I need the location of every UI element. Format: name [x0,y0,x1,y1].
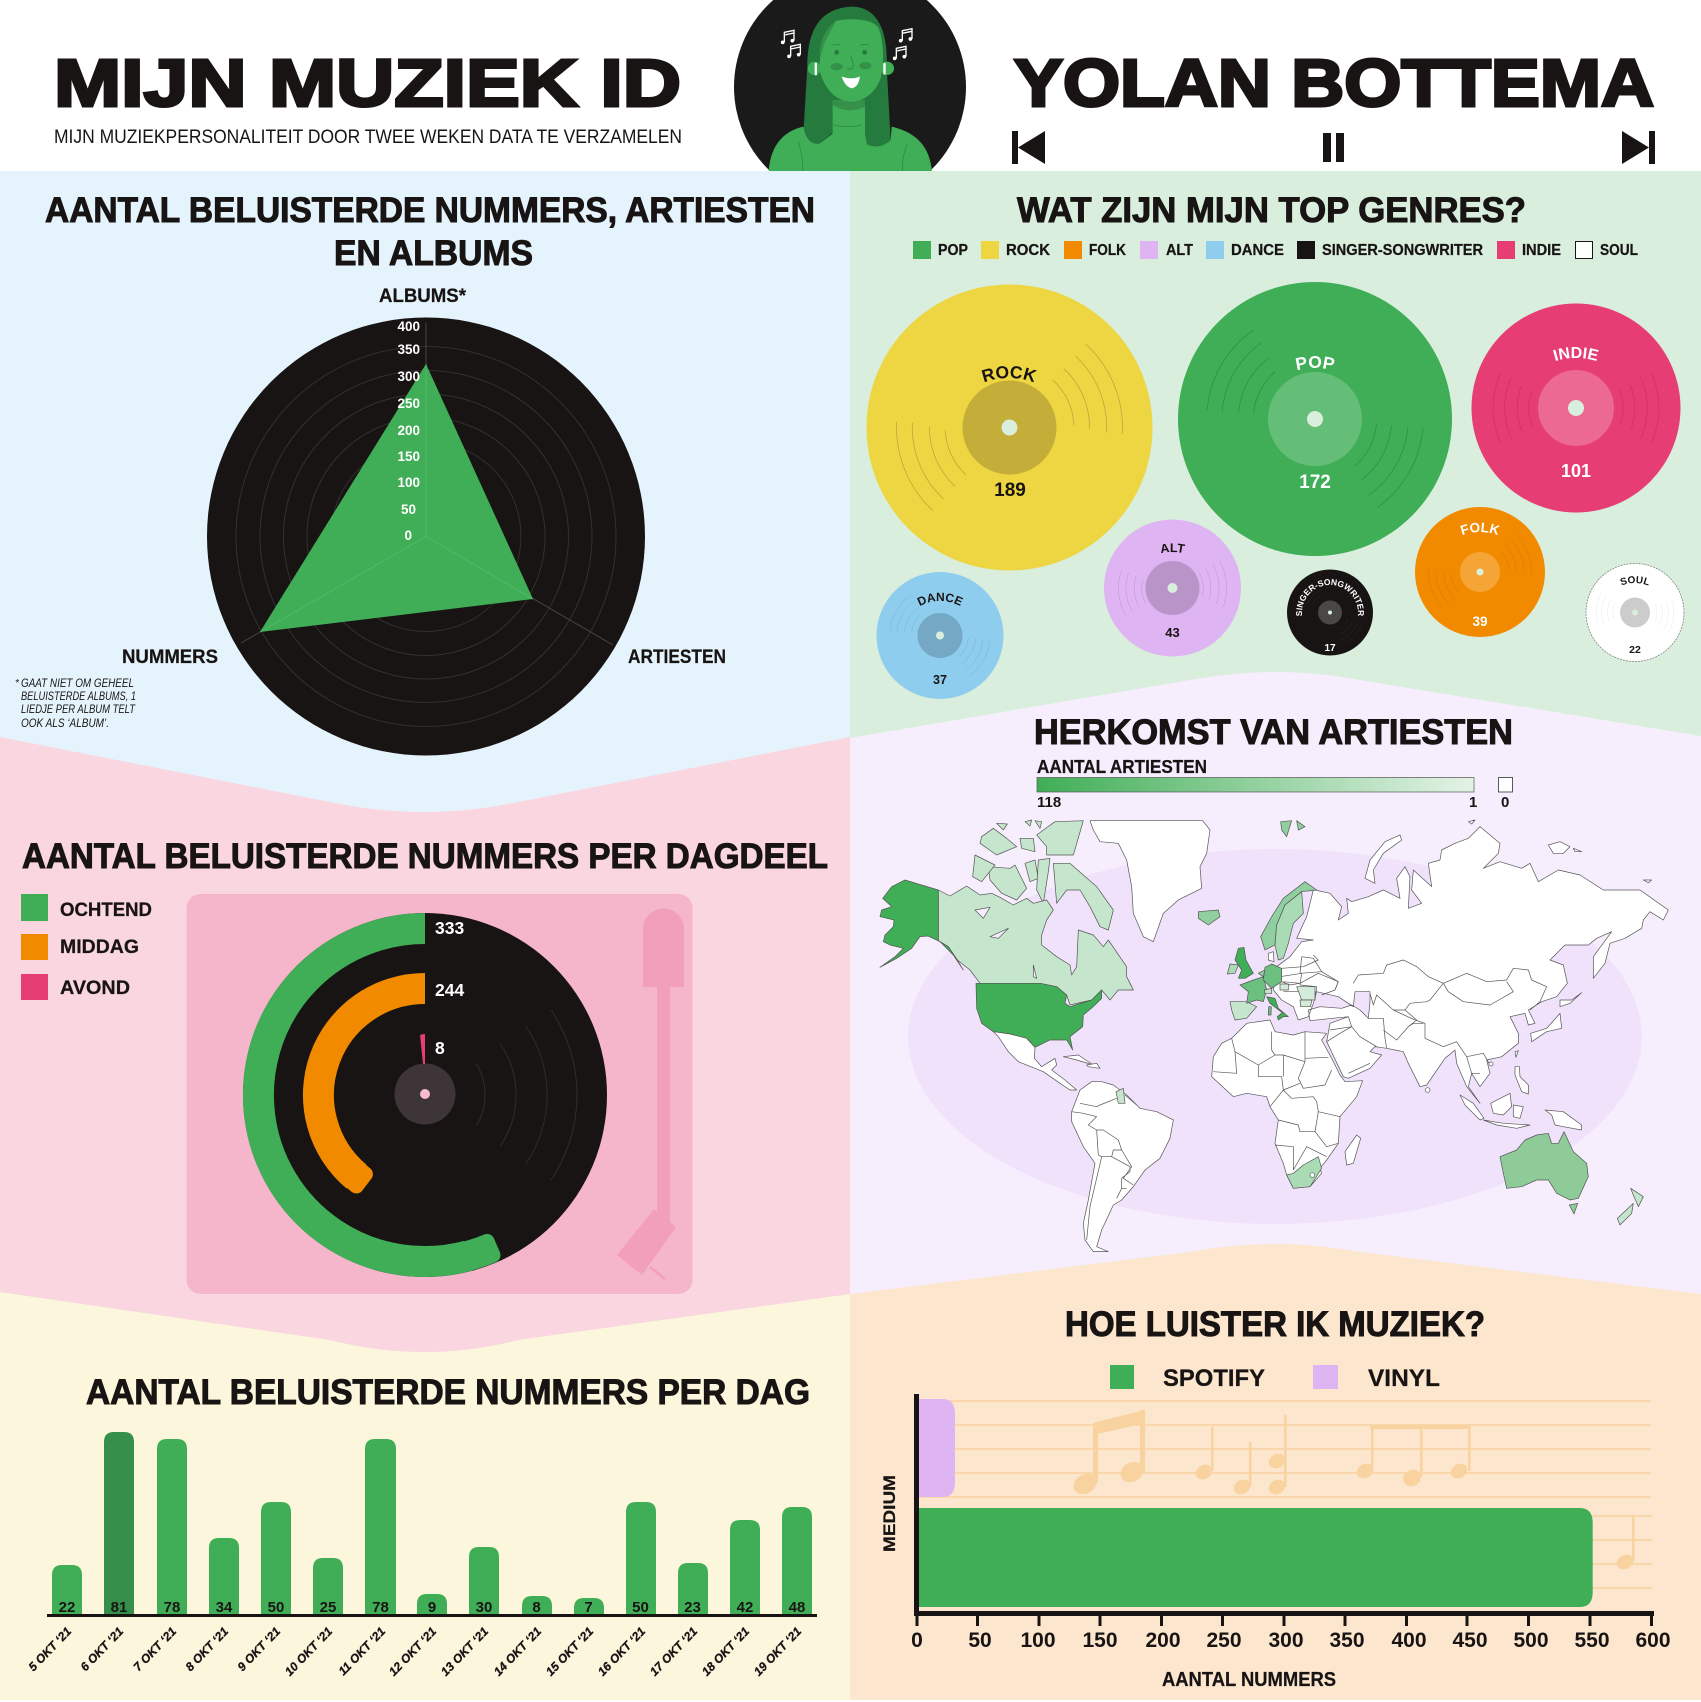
vinyl: singer-songwriter: 17 [1324,643,1336,654]
radar axis label: nummers: NUMMERS [122,646,218,668]
vinyl: soul [1586,563,1684,662]
bar values: 42 [737,1599,753,1616]
Canada islands [973,820,1133,990]
Sweden [1275,892,1303,960]
panel: albums radar background [0,171,850,831]
vinyl: pop [1178,282,1452,556]
page background white header [0,0,1701,171]
Romania and Bulgaria [1297,987,1315,1000]
radar scale labels: 0 [404,528,412,543]
Italy [1267,997,1288,1020]
panel: origin map background [850,672,1701,1300]
heading: origin of artists: HERKOMST VAN ARTIESTEN [1034,713,1513,752]
legend: daypart: AVOND [60,977,130,999]
vinyl: singer-songwriter [1287,570,1373,656]
vinyl: dance: 37 [933,673,947,687]
vinyl: pop: 172 [1299,472,1331,493]
date labels: 10 OKT ‘21 [282,1624,335,1679]
vinyl: indie: 101 [1561,461,1591,481]
legend: genres: DANCE [1231,242,1284,259]
footnote: LIEDJE PER ALBUM TELT [21,702,136,716]
vinyl: alt: 43 [1165,625,1180,640]
icon: note beside spotify bar [1614,1517,1636,1572]
footnote: GAAT NIET OM GEHEEL [21,676,134,690]
bar: avond 8 [420,1034,425,1064]
panel: daypart background [0,737,850,1352]
panel: per day background [0,1280,850,1700]
vinyl: pop: POP [1296,356,1334,370]
legend: genres: ROCK [1006,242,1051,259]
axis tick labels: 200 [1145,1629,1181,1652]
Arctic islands [1365,835,1402,883]
vinyl: rock: 189 [994,480,1026,501]
map legend: 1 [1469,794,1477,811]
map legend [1037,756,1512,811]
icon: triple beamed notes [1354,1425,1471,1489]
axis tick labels: 250 [1206,1629,1242,1652]
legend: genres [913,241,1638,259]
legend: medium: VINYL [1368,1365,1440,1392]
heading: how I listen: HOE LUISTER IK MUZIEK? [1065,1305,1485,1344]
France [1240,977,1267,1003]
Eurasia [1273,827,1668,1103]
radar scale labels: 50 [401,502,416,517]
legend: genres: POP [938,242,968,259]
South America [1072,1082,1173,1252]
subtitle: MIJN MUZIEKPERSONALITEIT DOOR TWEE WEKEN DATA TE VERZAMELEN [54,126,682,148]
bar: spotify [919,1508,1593,1607]
date labels: 11 OKT ‘21 [336,1624,388,1678]
Norway [1261,882,1317,950]
date labels: 17 OKT ‘21 [647,1624,700,1679]
radar scale labels: 100 [397,475,420,490]
axis tick labels [911,1629,1671,1652]
Caribbean [1063,1055,1093,1065]
vinyl: alt: ALT [1161,543,1186,554]
Americas, Europe and Africa [880,820,1363,1252]
avatar: woman with earbuds [734,0,966,171]
vinyl: soul: SOUL [1620,576,1649,586]
Japan and East Asia islands [1531,1013,1562,1042]
radar scale labels: 250 [397,396,420,411]
bar values: 25 [320,1599,336,1616]
radar scale labels: 300 [397,369,420,384]
date labels: 15 OKT ‘21 [543,1624,596,1679]
Switzerland and Austria [1264,988,1272,993]
staff lines and music notes [919,1401,1652,1588]
Africa [1212,1020,1363,1188]
radar axis label: albums: ALBUMS* [379,286,467,307]
map legend: 118 [1037,794,1061,811]
icon: single notes [1193,1415,1288,1497]
bar values: 78 [164,1599,180,1616]
radar scale labels: 150 [397,449,420,464]
icon: beamed notes [1070,1410,1147,1498]
radar chart [207,318,645,756]
map legend: 0 [1501,794,1509,811]
axis tick labels: 600 [1635,1629,1671,1652]
bar values: 9 [428,1599,436,1616]
map backdrop [908,849,1642,1224]
bar chart: medium [911,1394,1671,1652]
date labels [26,1624,804,1679]
radar scale labels [397,319,420,543]
vinyl: dance [876,572,1004,699]
icon: player controls [1012,131,1655,164]
map legend: AANTAL ARTIESTEN [1037,756,1207,777]
panel: how I listen background [850,1244,1701,1700]
icon: tonearm [617,908,684,1279]
Australia [1500,1132,1588,1200]
bars [52,1432,812,1615]
axis tick labels: 100 [1020,1629,1056,1652]
axis tick labels: 450 [1452,1629,1488,1652]
axis line [47,1614,817,1617]
turntable radial bar chart [186,884,692,1306]
Europe borders [1282,955,1338,992]
legend: genres: SINGER-SONGWRITER [1322,242,1483,259]
legend: genres: ALT [1166,242,1193,259]
heading: per day: AANTAL BELUISTERDE NUMMERS PER DAG [86,1373,810,1412]
date labels: 5 OKT ‘21 [26,1624,74,1674]
heading: aantal nummers artiesten albums [45,191,815,273]
USA [976,983,1102,1050]
axis tick labels: 150 [1082,1629,1118,1652]
legend: genres: FOLK [1089,242,1127,259]
panel: genres background [850,171,1701,771]
date labels: 8 OKT ‘21 [183,1624,231,1674]
axis tick labels: 50 [968,1629,992,1652]
bar chart: songs per day [26,1432,817,1679]
Mexico and Central America [993,1032,1077,1090]
vinyl: indie [1472,304,1680,512]
value labels: 244 [435,980,464,1000]
axis title: aantal nummers: AANTAL NUMMERS [1162,1669,1336,1691]
axis tick labels: 400 [1391,1629,1427,1652]
bar: middag 244 [318,988,425,1186]
vinyl: soul: 22 [1629,644,1641,656]
vinyl: folk [1415,507,1545,637]
vinyl: dance: DANCE [917,592,964,606]
legend: genres: INDIE [1522,242,1561,259]
Denmark [1268,952,1274,962]
vinyl: rock [866,284,1152,570]
axis tick labels: 0 [911,1629,923,1652]
bar values: 22 [59,1599,75,1616]
heading: top genres: WAT ZIJN MIJN TOP GENRES? [1017,191,1526,230]
bar values [59,1599,805,1616]
axis tick labels: 300 [1268,1629,1304,1652]
value labels: 333 [435,918,464,938]
bar values: 7 [584,1599,593,1616]
bar: vinyl [919,1399,955,1497]
vinyl: alt [1104,520,1241,656]
South Africa [1287,1157,1322,1188]
bar: ochtend 333 [258,928,493,1266]
world map [880,820,1668,1252]
value labels: 8 [435,1038,445,1058]
Greenland [1090,821,1210,942]
date labels: 9 OKT ‘21 [235,1624,283,1674]
axis tick labels: 500 [1513,1629,1549,1652]
date labels: 12 OKT ‘21 [386,1624,439,1679]
date labels: 14 OKT ‘21 [491,1624,544,1679]
United Kingdom [1235,947,1253,978]
legend: medium: SPOTIFY [1163,1365,1265,1392]
radar scale labels: 350 [397,342,420,357]
axis tick labels: 550 [1574,1629,1610,1652]
title: Yolan Bottema: YOLAN BOTTEMA [1014,46,1654,121]
radar scale labels: 200 [397,423,420,438]
Alaska [880,880,963,970]
heading: daypart: AANTAL BELUISTERDE NUMMERS PER DAGDEEL [22,837,828,876]
radar axis label: artiesten: ARTIESTEN [628,646,726,668]
date labels: 7 OKT ‘21 [131,1624,179,1674]
date labels: 16 OKT ‘21 [595,1624,648,1679]
footnote: OOK ALS ‘ALBUM’. [21,716,109,730]
date labels: 6 OKT ‘21 [78,1624,126,1674]
bar values: 48 [789,1599,805,1616]
legend: medium [1110,1365,1440,1392]
date labels: 19 OKT ‘21 [751,1624,804,1679]
bar values: 50 [632,1599,649,1616]
bar values: 50 [268,1599,284,1616]
bar values: 8 [532,1599,541,1616]
Netherlands [1258,970,1265,977]
date labels: 18 OKT ‘21 [699,1624,752,1679]
vinyl: singer-songwriter: SINGER-SONGWRITER [1296,579,1364,616]
heading: aantal nummers artiesten albums: AANTAL BELUISTERDE NUMMERS, ARTIESTEN [45,191,815,230]
vinyl: folk: FOLK [1460,522,1500,535]
vinyl: folk: 39 [1472,614,1488,629]
bar values: 34 [216,1599,233,1616]
footnote: * [15,678,20,689]
date labels: 13 OKT ‘21 [438,1624,491,1679]
legend: daypart: OCHTEND [60,899,152,921]
footnote: BELUISTERDE ALBUMS, 1 [21,689,136,703]
Germany [1263,964,1282,988]
vinyl: indie: INDIE [1553,347,1599,361]
legend: daypart [21,894,152,1000]
value labels [435,918,464,1058]
radar data polygon [260,364,533,632]
radar scale labels: 400 [397,319,420,334]
footnote [15,676,136,730]
country borders Asia [1280,957,1547,1073]
vinyl: rock: ROCK [982,366,1037,382]
Asia, Australia and east [1273,820,1668,1225]
legend: genres: SOUL [1600,242,1638,259]
bar values: 23 [684,1599,701,1616]
bar values: 78 [372,1599,389,1616]
Ireland [1227,964,1238,974]
Canada [938,886,1133,1005]
heading: aantal nummers artiesten albums: EN ALBUMS [334,234,533,273]
New Zealand [1631,1188,1643,1207]
axis title: medium: MEDIUM [880,1475,899,1552]
title: Mijn Muziek ID: MIJN MUZIEK ID [54,46,681,121]
bar values: 30 [476,1599,492,1616]
axis tick labels: 350 [1329,1629,1365,1652]
Iceland and Svalbard [1198,821,1305,925]
axes [914,1394,1654,1626]
bar values: 81 [111,1599,127,1616]
legend: daypart: MIDDAG [60,936,139,958]
Spain [1230,1002,1257,1020]
Madagascar [1345,1135,1361,1165]
